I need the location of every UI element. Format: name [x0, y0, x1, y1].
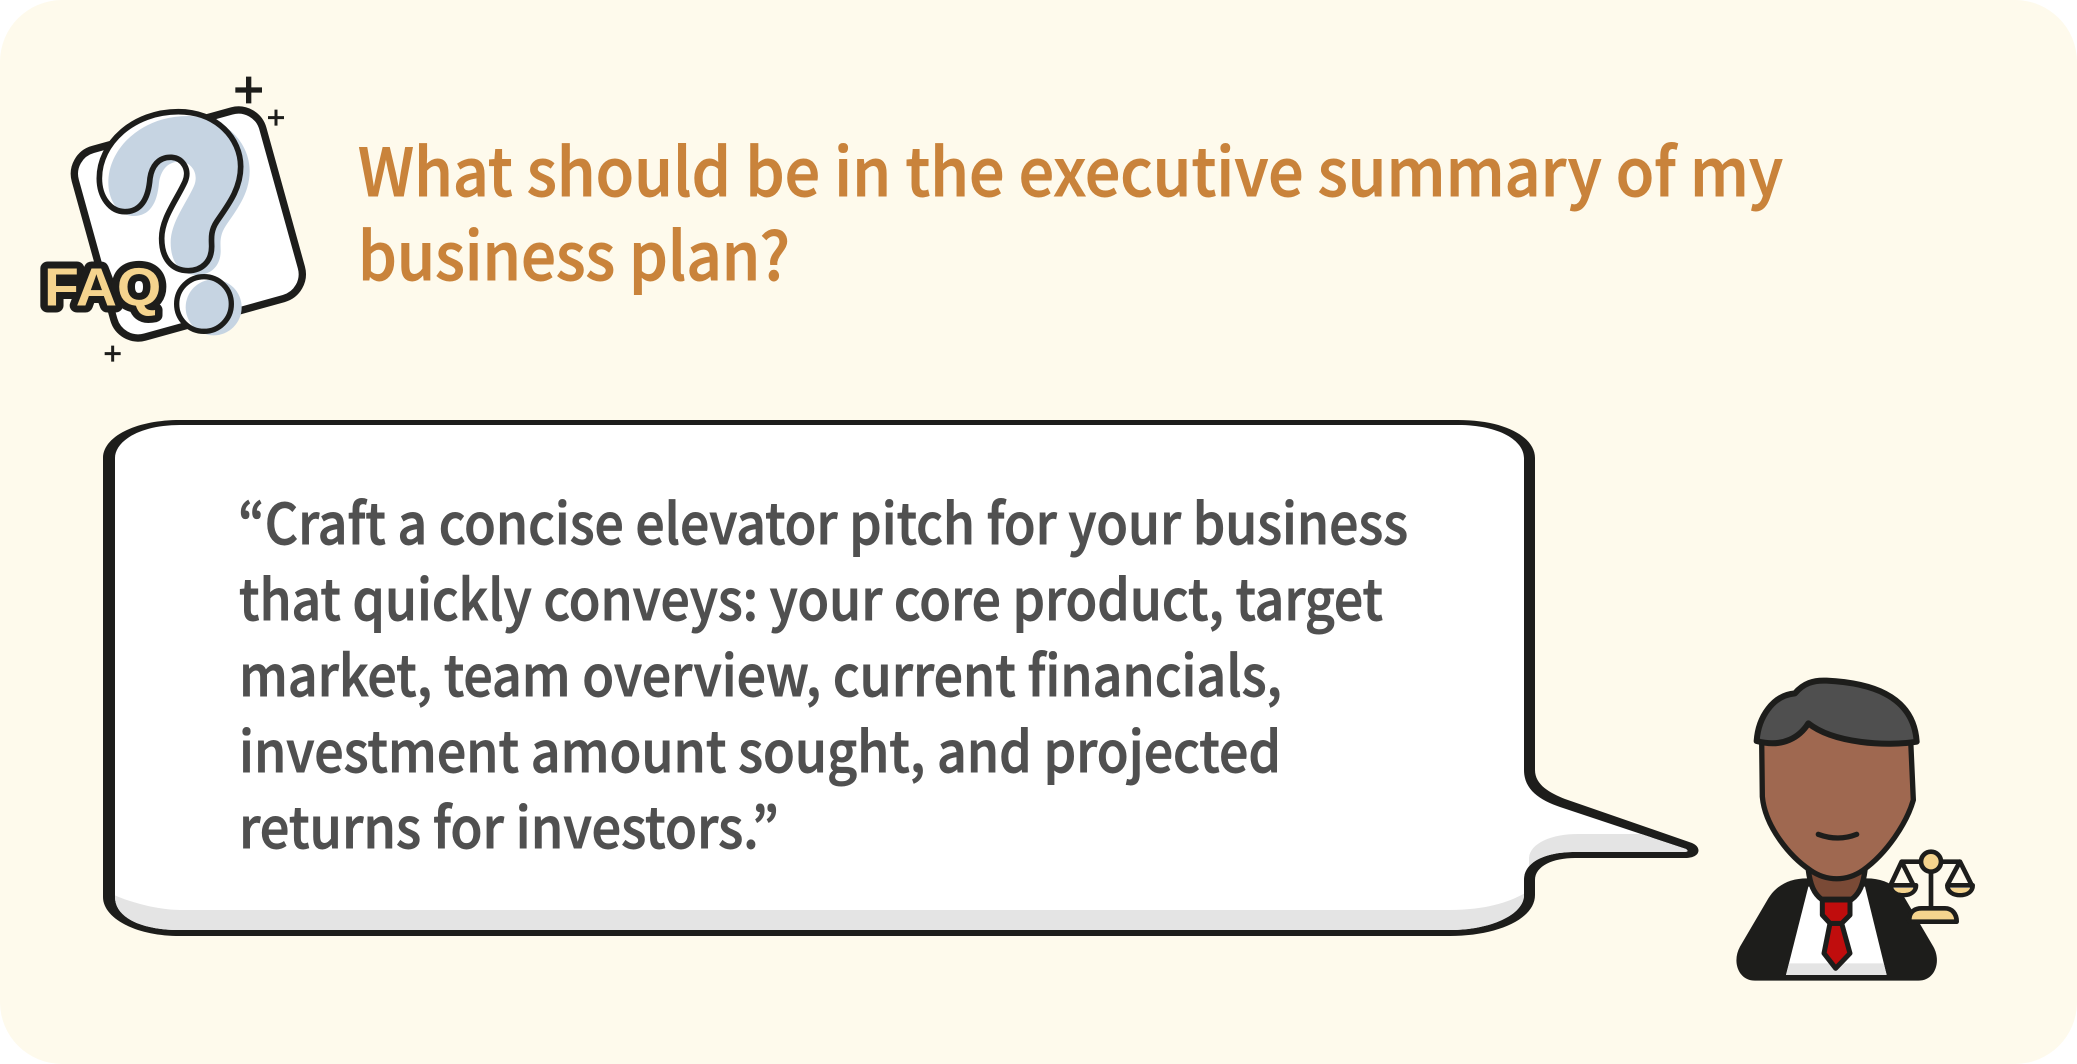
heading: [358, 120, 1783, 300]
icon: businessman with scales: [1736, 681, 1973, 981]
icon: tilted white card: [69, 104, 308, 344]
icon: question mark dot: [177, 277, 242, 335]
quote text: investment amount sought, and projected: [239, 708, 1281, 789]
heading: What should be in the executive summary of my: [358, 120, 1783, 216]
hair: [1757, 681, 1917, 744]
quote text: “Craft a concise elevator pitch for your business: [238, 480, 1408, 561]
quote text: market, team overview, current financials,: [239, 632, 1282, 713]
icon: question mark hook: [99, 112, 250, 275]
heading: business plan?: [358, 204, 790, 300]
tie: [1822, 900, 1850, 968]
icon: FAQ question mark: [44, 77, 308, 362]
quote text: that quickly conveys: your core product, target: [239, 556, 1383, 637]
face: [1762, 713, 1913, 879]
speech bubble: [103, 420, 1700, 940]
jacket: [1736, 878, 1937, 981]
icon: FAQ badge text: FAQ: [44, 259, 161, 318]
neck: [1808, 870, 1865, 899]
quote text: returns for investors.”: [239, 784, 779, 865]
scales of justice: [1891, 852, 1973, 922]
icon: sparkles: [105, 77, 284, 362]
mouth: [1818, 834, 1857, 838]
quote text: [238, 480, 1408, 865]
shirt: [1786, 887, 1887, 975]
